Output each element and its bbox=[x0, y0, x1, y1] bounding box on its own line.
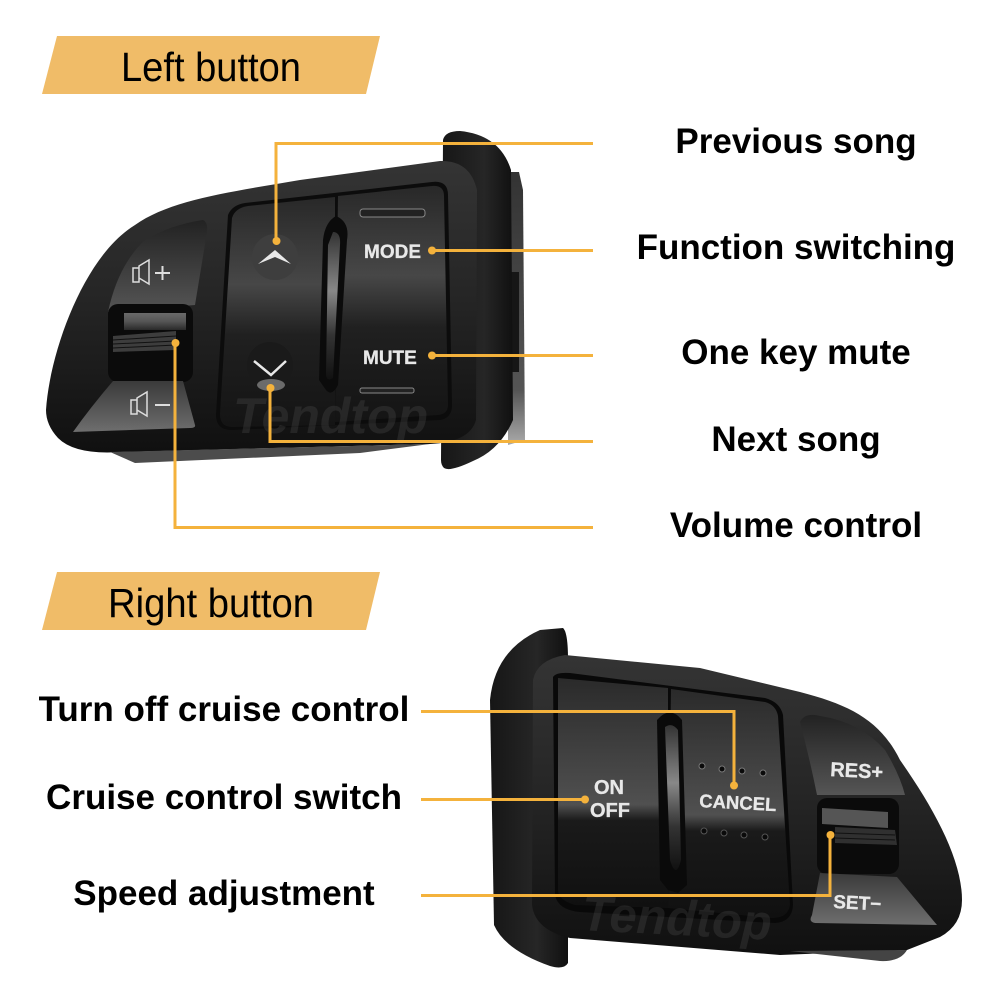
product: left button unit bbox=[46, 131, 525, 469]
flange of left unit bbox=[441, 131, 525, 469]
ON label: ON bbox=[594, 777, 624, 799]
OFF label: OFF bbox=[590, 800, 630, 822]
heading: Left button bbox=[42, 36, 380, 94]
callout line: one key mute bbox=[428, 352, 593, 360]
body of right unit bbox=[532, 655, 962, 955]
flange of right unit bbox=[490, 628, 568, 967]
label: Function switching: Function switching bbox=[637, 228, 955, 267]
MODE label: MODE bbox=[364, 242, 421, 263]
centre slot bbox=[657, 712, 687, 893]
callout line: previous song bbox=[272, 144, 593, 245]
body of left unit bbox=[46, 161, 477, 452]
watermark: Tendtop bbox=[580, 885, 773, 951]
speed wheel bbox=[817, 798, 899, 874]
callout line: cruise control switch bbox=[421, 796, 589, 804]
CANCEL label: CANCEL bbox=[699, 790, 777, 815]
SET- key bbox=[811, 873, 937, 925]
RES+ key bbox=[800, 715, 905, 795]
indicator dots top bbox=[699, 763, 766, 776]
label: Turn off cruise control: Turn off cruise control bbox=[39, 690, 409, 729]
bottom bar bbox=[360, 388, 414, 393]
callout line: function switching bbox=[428, 246, 593, 254]
main panel bbox=[553, 673, 793, 923]
label: Volume control: Volume control bbox=[670, 506, 922, 545]
callout line: turn off cruise control bbox=[421, 712, 738, 790]
top bar bbox=[360, 209, 425, 217]
SET- key: SET− bbox=[833, 892, 882, 916]
next button bbox=[247, 342, 293, 391]
RES+ key: RES+ bbox=[830, 759, 884, 784]
callout line: next song bbox=[266, 384, 593, 442]
callout line: volume control bbox=[172, 339, 593, 528]
volume up key bbox=[108, 220, 207, 312]
callout line: speed adjustment bbox=[421, 831, 834, 896]
label: Cruise control switch: Cruise control switch bbox=[46, 778, 402, 817]
heading: Right button bbox=[42, 572, 380, 630]
label: Previous song: Previous song bbox=[675, 122, 917, 161]
MUTE label: MUTE bbox=[363, 348, 417, 369]
previous button bbox=[252, 234, 298, 280]
label: Speed adjustment: Speed adjustment bbox=[73, 874, 375, 913]
watermark: Tendtop bbox=[233, 388, 428, 444]
indicator dots bottom bbox=[701, 828, 768, 840]
centre slot bbox=[319, 216, 348, 393]
volume wheel bbox=[108, 304, 193, 382]
heading: Right button: Right button bbox=[108, 580, 314, 626]
main panel bbox=[216, 182, 452, 430]
heading: Left button: Left button bbox=[121, 44, 301, 90]
label: Next song: Next song bbox=[711, 420, 881, 459]
volume down key bbox=[73, 381, 195, 432]
label: One key mute: One key mute bbox=[681, 333, 911, 372]
product: right button unit bbox=[490, 628, 962, 967]
